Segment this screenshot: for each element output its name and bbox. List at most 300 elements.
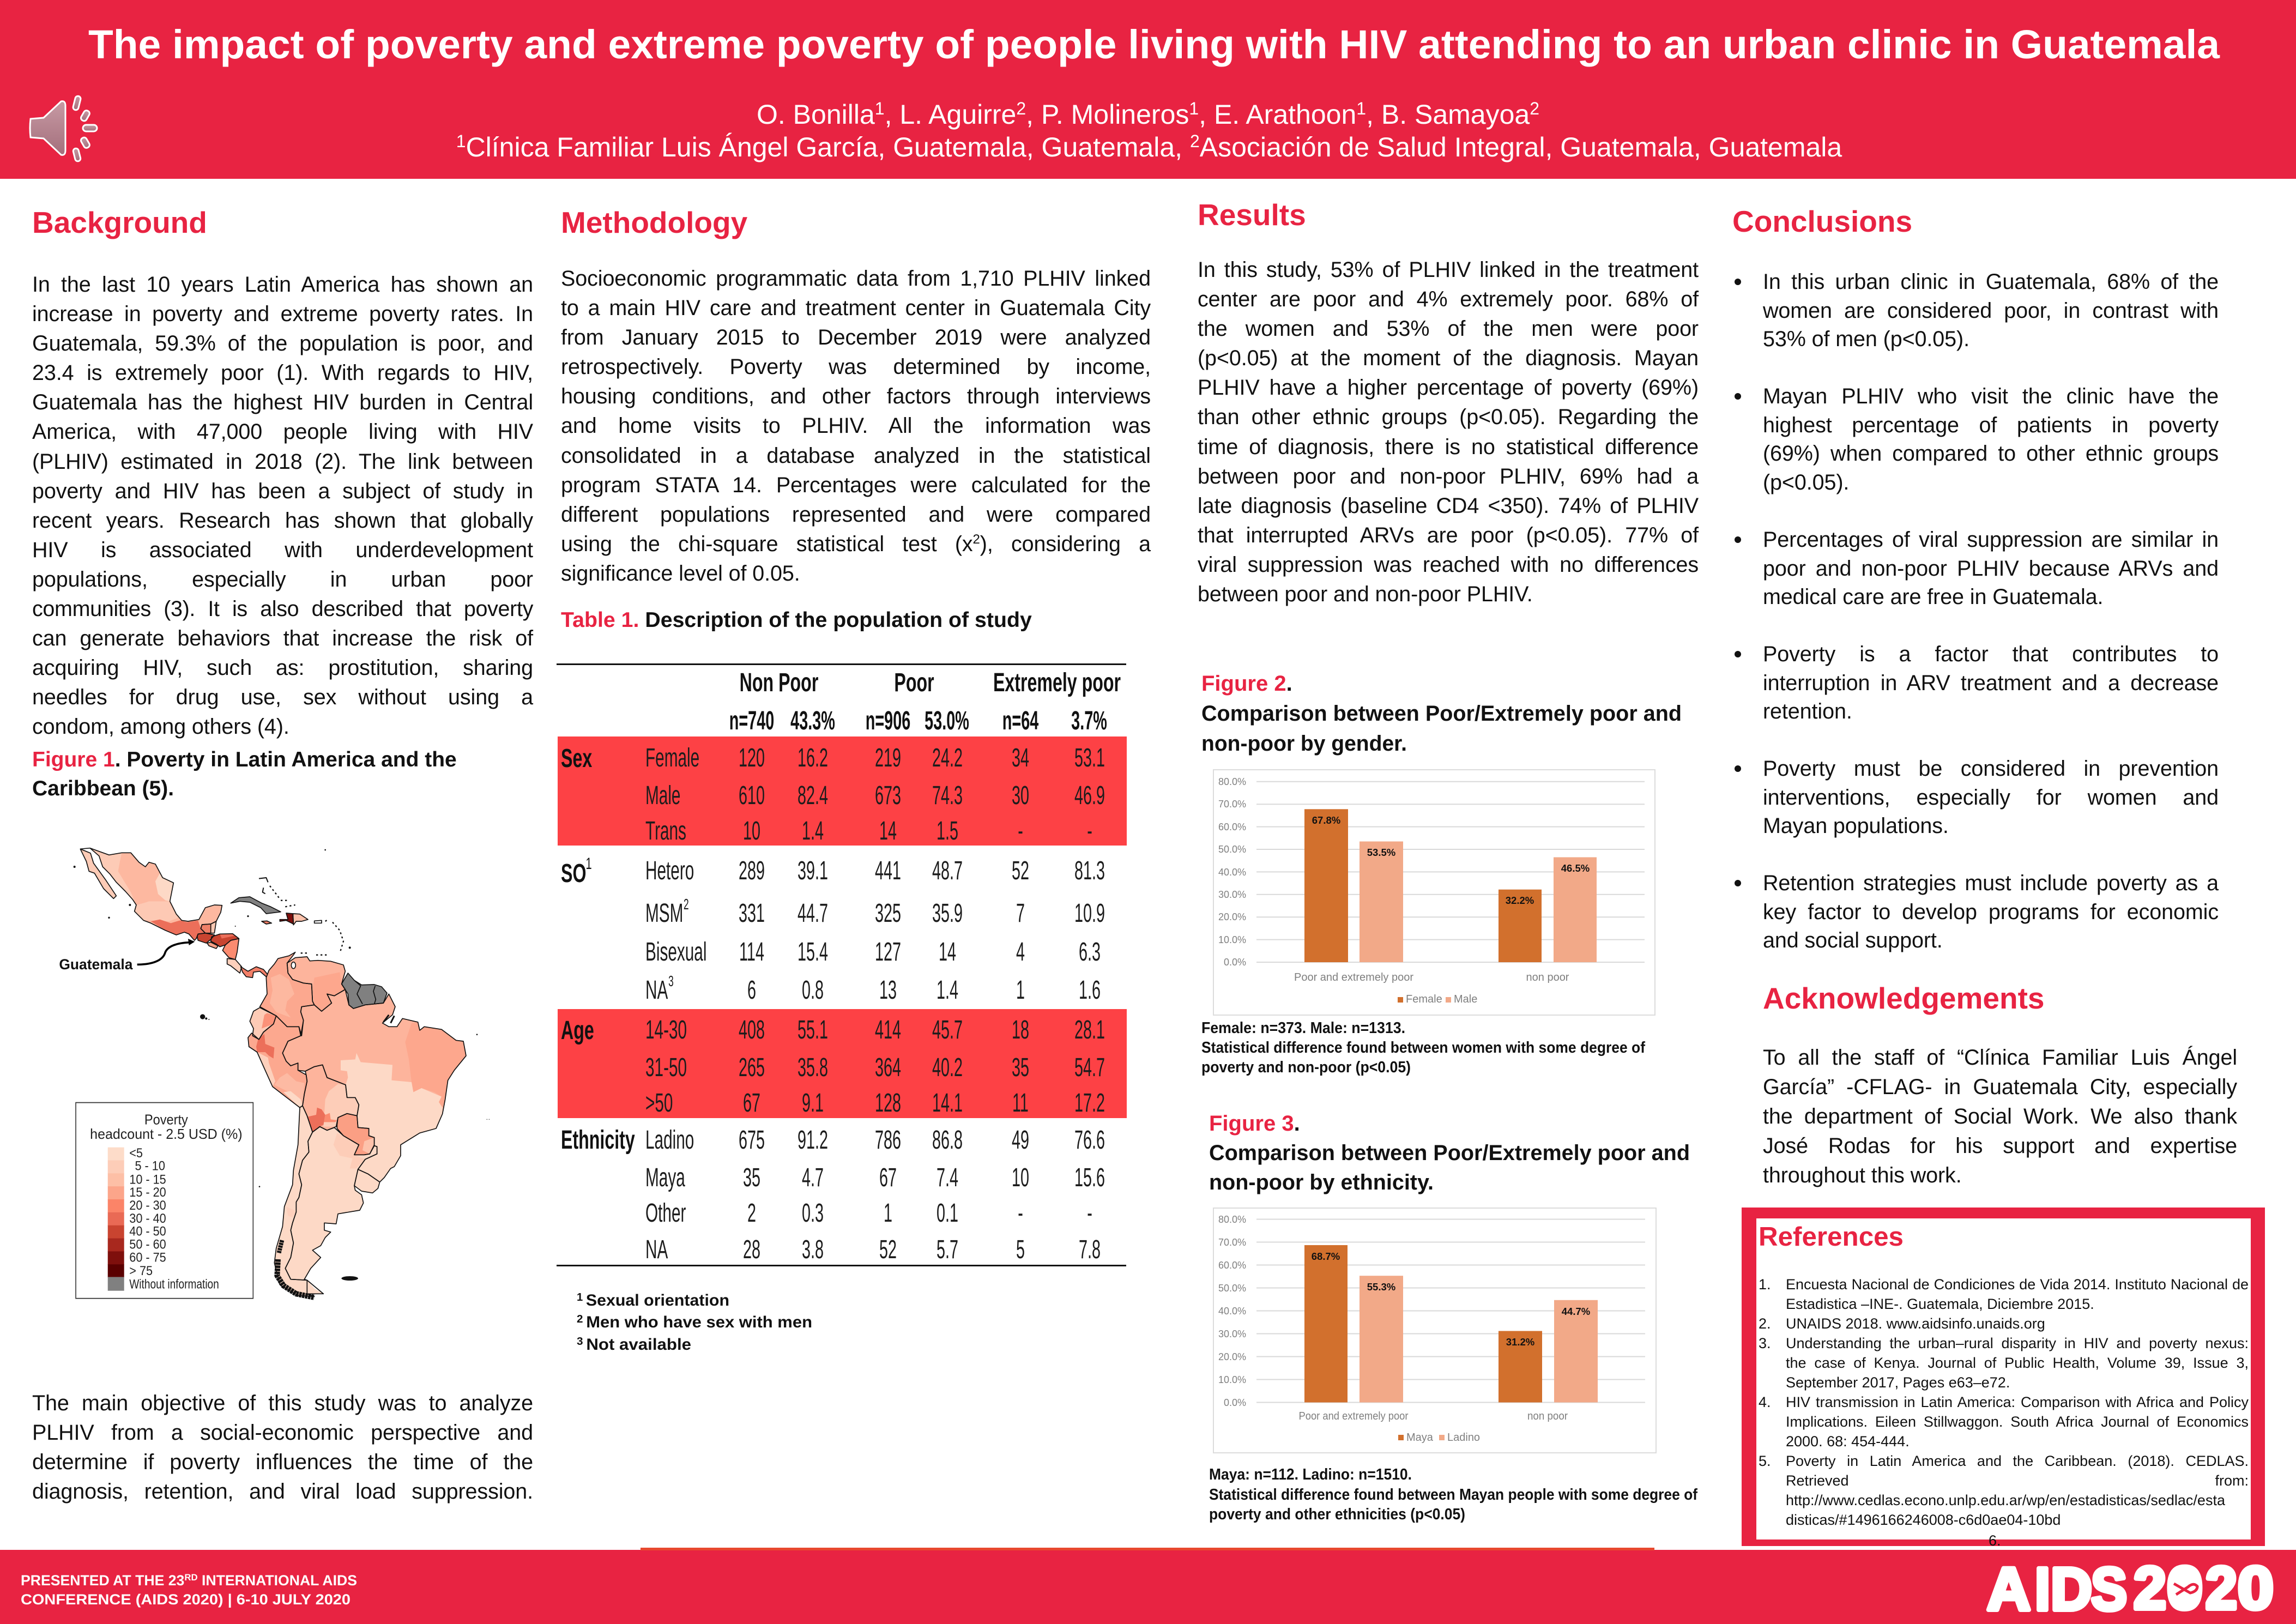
panel: figure 3 caption: Figure 3. [1209,1112,1300,1136]
column: extremely poor n: - [1018,817,1023,846]
column: extremely poor n: 35 [1012,1053,1029,1082]
text: main objective: PLHIV from a social-economic perspective and [32,1421,533,1445]
column: non poor percent: 3.8 [802,1235,824,1264]
callout: Guatemala arrow [137,939,195,964]
column: extremely poor n: 1 [1016,976,1025,1005]
column: poor percent: 40.2 [932,1053,963,1082]
table row labels: NA [645,976,668,1005]
column: extremely poor n: 34 [1012,744,1029,772]
map legend: 5 - 10 [135,1158,165,1173]
logo: AIDS 2020: D [2051,1556,2092,1623]
conference note [21,1572,357,1608]
column: poor n: 786 [875,1126,901,1155]
chart 3 categories: Poor and extremely poor [1298,1410,1409,1422]
column: extremely poor n: 11 [1012,1089,1029,1118]
table 1 caption: Table 1. Description of the population of study [561,608,1032,632]
chart 2 gridlines [1256,782,1645,962]
authors: 2 [1016,99,1026,118]
map legend: <5 [129,1145,143,1160]
column: poor percent: 1.4 [936,976,958,1005]
column: non poor n: 114 [739,938,764,967]
text: reference list [1759,1276,2249,1549]
bullet 3: poor and non-poor PLHIV because ARVs and [1763,557,2219,581]
table row labels: MSM [645,899,683,928]
column: non poor percent: 9.1 [802,1089,824,1118]
chart 2 axis labels [1218,776,1246,968]
text: results paragraph: between poor and non-poor PLHIV. [1198,582,1533,606]
bullet 2 [1735,384,2219,494]
map: South America [248,952,490,1297]
table footnotes: 3 [577,1336,586,1348]
column: extremely poor n: 30 [1012,781,1029,810]
logo: AIDS 2020 [1987,1555,2274,1623]
map: Mexico, Central America and Caribbean [74,848,351,1020]
text: reference list: 2000. 68: 454-444. [1786,1433,1910,1450]
text: background paragraph: needles for drug use, sex without using a [32,685,533,709]
panel: table 1 population description [557,663,1127,1354]
table group headers: n=64 [1002,707,1038,735]
text: acknowledgements [1763,1046,2237,1187]
column: poor n: 325 [875,899,901,928]
table footnotes: Sexual orientation [586,1291,729,1309]
column: poor n: 1 [884,1199,892,1228]
table red bands [558,736,1127,1118]
chart 2 data labels: 53.5% [1367,847,1395,858]
column: extremely poor n: 5 [1016,1235,1025,1264]
chart: figure 3 bars by ethnicity [1213,1208,1656,1453]
table category labels: SO [561,859,586,888]
text: results paragraph: than other ethnic groups (p<0.05). Regarding the [1198,405,1699,429]
panel: figure 2 caption: Figure 2. [1201,672,1292,696]
authors: 1 [875,99,885,118]
text: background paragraph: communities (3). It is also described that poverty [32,597,533,621]
bullet 6: and social support. [1763,928,1943,952]
text: reference list: HIV transmission in Latin America: Comparison with Africa and Policy [1786,1394,2249,1410]
map legend: Poverty [144,1113,188,1128]
chart 3 legend [1398,1432,1480,1444]
table row labels: 3 [668,973,674,989]
bullet 4: Poverty is a factor that contributes to [1763,642,2219,666]
header banner [0,0,2296,179]
bullet 4: retention. [1763,699,1852,723]
bullet 1: women are considered poor, in contrast with [1763,299,2219,323]
table category labels: Age [561,1016,594,1045]
table footnotes: Men who have sex with men [586,1313,812,1331]
text: results paragraph: viral suppression was reached with no differences [1198,553,1699,577]
column: non poor percent: 1.4 [802,817,824,846]
column: extremely poor n [1012,744,1029,1264]
chart 3 axis labels: 50.0% [1218,1283,1246,1294]
figure 1 caption [32,748,457,800]
text: background paragraph [32,273,533,739]
bullet 2: (p<0.05). [1763,470,1849,494]
panel: figure 2 caption: non-poor by gender. [1201,732,1407,756]
text: methodology paragraph: different populations represented and were compared [561,503,1151,527]
bullet 3: medical care are free in Guatemala. [1763,585,2103,609]
column: poor percent: 14 [939,938,956,967]
map specks [250,1034,490,1281]
conference note: RD [184,1572,198,1583]
text: reference list: 4. [1759,1394,1771,1410]
text: conclusions list [1735,270,2219,952]
column: extremely poor percent: 53.1 [1074,744,1105,772]
chart 3 categories: non poor [1527,1410,1568,1422]
text: reference list: 3. [1759,1335,1771,1351]
text: background paragraph: acquiring HIV, such as: prostitution, sharing [32,656,533,680]
column: poor percent: 0.1 [936,1199,958,1228]
bullet 1: 53% of men (p<0.05). [1763,327,1969,351]
table category labels: Ethnicity [561,1125,635,1155]
chart 3 categories [1298,1410,1568,1422]
column: poor n: 14 [879,817,897,846]
table row labels: Trans [645,817,686,846]
references heading: References [1759,1222,1904,1252]
text: background paragraph: poverty and HIV has been a subject of study in [32,479,533,503]
text: reference list: http://www.cedlas.econo.unlp.edu.ar/wp/en/estadisticas/sedlac/esta [1786,1492,2225,1508]
text: results paragraph: center are poor and 4% extremely poor. 68% of [1198,287,1699,311]
authors: 1 [1356,99,1366,118]
affiliations: 2 [1190,131,1200,151]
column: extremely poor n: 10 [1012,1163,1029,1192]
chart 2 categories: Poor and extremely poor [1294,971,1413,983]
chart 2 categories: non poor [1526,971,1569,983]
column: poor n: 441 [875,856,901,885]
text: main objective: determine if poverty influences the time of the [32,1450,533,1474]
text: results paragraph: PLHIV have a higher percentage of poverty (69%) [1198,376,1699,400]
figure 1 caption: Caribbean (5). [32,777,174,800]
panel: figure 2 caption [1201,672,1682,756]
text: reference list: 5. [1759,1453,1771,1469]
conference note: PRESENTED AT THE 23 [21,1572,187,1589]
table group headers: 3.7% [1071,707,1107,735]
text: methodology paragraph: significance level of 0.05. [561,562,800,585]
bullet 6 [1735,871,2219,952]
text: reference list: Retrieved from: [1786,1472,2249,1489]
figure 2 note [1201,1019,1645,1076]
column: non poor n: 610 [739,781,765,810]
text: results paragraph: between poor and non-poor PLHIV, 69% had a [1198,464,1699,488]
table category labels: Sex [561,744,592,773]
panel: figure 3 caption: non-poor by ethnicity. [1209,1170,1434,1194]
chart 3 data labels: 31.2% [1506,1336,1534,1348]
chart 3 data labels: 44.7% [1562,1306,1590,1317]
table row labels: Bisexual [645,938,706,967]
text: methodology paragraph: Socioeconomic programmatic data from 1,710 PLHIV linked [561,267,1151,291]
column: non poor percent: 4.7 [802,1163,824,1192]
chart 2 axis labels: 80.0% [1218,776,1246,787]
bullet 3 [1735,528,2219,609]
affiliations: Asociación de Salud Integral, Guatemala, Guatemala [1200,132,1842,162]
figure 2 note: poverty and non-poor (p<0.05) [1201,1059,1411,1076]
chart 3 axis labels: 0.0% [1224,1397,1246,1408]
map legend: 20 - 30 [129,1198,166,1212]
table row labels [645,744,706,1264]
text: acknowledgements: García” -CFLAG- in Guatemala City, especially [1763,1075,2237,1099]
bullet 1: In this urban clinic in Guatemala, 68% of the [1763,270,2219,294]
table row labels: Other [645,1199,686,1228]
column: non poor percent: 15.4 [797,938,828,967]
chart 2 legend: Male [1454,993,1477,1005]
text: reference list: Encuesta Nacional de Condiciones de Vida 2014. Instituto Nacional de [1786,1276,2249,1293]
column: non poor n: 10 [743,817,760,846]
text: methodology paragraph [561,267,1151,585]
column: extremely poor percent: 17.2 [1074,1089,1105,1118]
text: methodology paragraph: housing conditions, and other factors through interviews [561,384,1151,408]
column: non poor percent: 55.1 [797,1016,828,1045]
chart 3 data labels [1312,1251,1590,1348]
figure 2 note: Statistical difference found between women with some degree of [1201,1039,1645,1056]
column: non poor n: 67 [743,1089,760,1118]
chart 2 axis labels: 50.0% [1218,844,1246,855]
table row labels: NA [645,1235,668,1264]
table group headers: n=906 [866,707,910,735]
table row labels: Female [645,744,699,772]
table footnotes: 1 [577,1291,586,1303]
chart 2 axis labels: 40.0% [1218,867,1246,878]
table group headers: Non Poor [740,668,818,697]
column: non poor n: 6 [747,976,756,1005]
table group headers: n=740 [729,707,774,735]
text: results paragraph: the women and 53% of the men were poor [1198,317,1699,341]
map legend: 10 - 15 [129,1172,166,1187]
column: non poor percent: 44.7 [797,899,828,928]
conference note: INTERNATIONAL AIDS [198,1572,357,1589]
text: reference list: Implications. Eileen Stillwaggon. South Africa Journal of Economics [1786,1414,2249,1430]
text: background paragraph: Guatemala, 59.3% of the population is poor, and [32,331,533,355]
table category labels [561,744,635,1155]
bullet 2: Mayan PLHIV who visit the clinic have the [1763,384,2219,408]
South America borders [248,952,466,1297]
text: reference list: 2. [1759,1315,1771,1332]
chart 2 data labels [1312,814,1590,906]
authors: , L. Aguirre [885,99,1016,130]
column: non poor n: 675 [739,1126,765,1155]
heading: Methodology: Methodology [561,206,747,239]
figure 3 note: Maya: n=112. Ladino: n=1510. [1209,1466,1412,1483]
chart 3 axis labels: 10.0% [1218,1374,1246,1385]
text: reference list: the case of Kenya. Journal of Public Health, Volume 39, Issue 3, [1786,1355,2249,1371]
table group headers [729,668,1121,735]
text: background paragraph: 23.4 is extremely poor (1). With regards to HIV, [32,361,533,385]
column: extremely poor percent: 28.1 [1074,1016,1105,1045]
chart 2 data labels: 46.5% [1561,862,1590,874]
column: poor percent: 14.1 [932,1089,963,1118]
text: reference list: Poverty in Latin America and the Caribbean. (2018). CEDLAS. [1786,1453,2249,1469]
table category labels: 1 [586,855,592,873]
column: extremely poor percent [1074,744,1105,1264]
text: methodology paragraph: from January 2015 to December 2019 were analyzed [561,325,1151,349]
bullet 4: interruption in ARV treatment and a decrease [1763,671,2219,695]
column: non poor n: 35 [743,1163,760,1192]
map: poverty in Latin America [59,848,490,1299]
table group headers: Extremely poor [993,668,1121,697]
chart 3 gridlines [1256,1219,1645,1402]
map legend: 30 - 40 [129,1211,166,1225]
chart 3 axis labels: 70.0% [1218,1237,1246,1248]
column: extremely poor n: 18 [1012,1016,1029,1045]
bullet 3: Percentages of viral suppression are similar in [1763,528,2219,552]
column: poor n: 13 [879,976,897,1005]
text: reference list: 1. [1759,1276,1771,1293]
column: poor percent: 45.7 [932,1016,963,1045]
figure 2 note: Female: n=373. Male: n=1313. [1201,1019,1405,1037]
chart 2 axis labels: 70.0% [1218,799,1246,810]
callout: Guatemala label: Guatemala [59,956,133,973]
text: background paragraph: HIV is associated with underdevelopment [32,538,533,562]
table footnotes [577,1291,812,1354]
chart 2 data labels: 32.2% [1506,895,1534,906]
panel: figure 2 caption: Comparison between Poor/Extremely poor and [1201,702,1682,726]
chart 3 axis labels: 20.0% [1218,1351,1246,1362]
column: poor n: 673 [875,781,901,810]
text: background paragraph: In the last 10 years Latin America has shown an [32,273,533,297]
column: non poor percent: 35.8 [797,1053,828,1082]
text: acknowledgements: the department of Social Work. We also thank [1763,1104,2237,1128]
column: poor n: 67 [879,1163,897,1192]
column: non poor percent: 0.8 [802,976,824,1005]
chart 2 legend: Female [1406,993,1442,1005]
column: non poor n: 28 [743,1235,760,1264]
column: extremely poor n: 49 [1012,1126,1029,1155]
column: poor n: 364 [875,1053,901,1082]
bullet 5: interventions, especially for women and [1763,786,2219,810]
column: non poor percent: 39.1 [797,856,828,885]
logo: AIDS 2020: 2 [2134,1555,2166,1622]
column: extremely poor percent: 81.3 [1074,856,1105,885]
table row labels: 2 [684,896,689,913]
text: main objective: diagnosis, retention, and viral load suppression. [32,1480,533,1504]
figure 3 note [1209,1466,1697,1523]
figure 3 note: poverty and other ethnicities (p<0.05) [1209,1506,1465,1523]
chart 2 axis labels: 0.0% [1224,957,1246,968]
column: poor n: 52 [879,1235,897,1264]
column: extremely poor n: 4 [1016,938,1025,967]
panel: figure 3 caption: Comparison between Poor/Extremely poor and [1209,1141,1690,1165]
title: The impact of poverty and extreme poverty of people living with HIV attending to an urban clinic in Guatemala [88,22,2220,67]
text: methodology paragraph: program STATA 14. Percentages were calculated for the [561,473,1151,497]
chart 3 axis labels: 80.0% [1218,1214,1246,1225]
chart 2 axis labels: 30.0% [1218,889,1246,900]
map legend: 40 - 50 [129,1224,166,1239]
affiliations: 1 [456,131,466,151]
chart: figure 2 bars by gender [1213,770,1655,1015]
bullet 5: Poverty must be considered in prevention [1763,757,2219,781]
column: poor n: 414 [875,1016,901,1045]
text: reference list: Estadistica –INE-. Guatemala, Diciembre 2015. [1786,1296,2094,1312]
text: methodology paragraph: using the chi-square statistical test (x2), considering a [561,532,1151,556]
text: main objective [32,1391,533,1504]
text: acknowledgements: throughout this work. [1763,1163,1962,1187]
heading: Conclusions: Conclusions [1732,204,1912,238]
bullet 2: highest percentage of patients in poverty [1763,413,2219,437]
table footnotes: 2 [577,1313,586,1325]
chart 3 data labels: 68.7% [1312,1251,1340,1262]
table row labels: 14-30 [645,1016,687,1045]
column: extremely poor percent: 54.7 [1074,1053,1105,1082]
footer banner [0,1548,2296,1624]
bullet 4 [1735,642,2219,723]
text: main objective: The main objective of this study was to analyze [32,1391,533,1415]
Mexico and Central America borders [80,848,343,977]
column: extremely poor percent: 46.9 [1074,781,1105,810]
text: reference list: disticas/#1496166246008-c6d0ae04-10bd [1786,1512,2061,1528]
column: extremely poor n: 7 [1016,899,1025,928]
column: extremely poor percent: 7.8 [1079,1235,1101,1264]
heading: Results: Results [1198,198,1306,232]
column: extremely poor percent: 6.3 [1079,938,1101,967]
text: results paragraph: late diagnosis (baseline CD4 <350). 74% of PLHIV [1198,494,1699,518]
logo: AIDS 2020: 0 [2167,1555,2203,1622]
column: extremely poor percent: - [1087,1199,1092,1228]
bullet 2: (69%) when compared to other ethnic groups [1763,442,2219,466]
text: 6. [1989,1532,2001,1549]
authors: , P. Molineros [1026,99,1189,130]
column: non poor percent: 16.2 [797,744,828,772]
authors: 2 [1530,99,1539,118]
chart 2 data labels: 67.8% [1312,814,1340,826]
column: poor percent: 74.3 [932,781,963,810]
column: extremely poor percent: - [1087,817,1092,846]
panel: figure 3 caption [1209,1112,1690,1194]
table row labels: 31-50 [645,1053,687,1082]
authors: , B. Samayoa [1366,99,1530,130]
map legend: > 75 [129,1263,153,1278]
heading: Background: Background [32,206,207,239]
column: non poor percent [797,744,828,1264]
logo: AIDS 2020: 0 [2238,1555,2274,1622]
column: poor percent: 5.7 [936,1235,958,1264]
text: reference list: UNAIDS 2018. www.aidsinfo.unaids.org [1786,1315,2045,1332]
table row labels: Male [645,781,680,810]
figure 1 caption: Figure 1. Poverty in Latin America and the [32,748,457,771]
column: poor n [875,744,901,1264]
column: extremely poor percent: 1.6 [1079,976,1101,1005]
chart 3 axis labels: 40.0% [1218,1306,1246,1317]
authors: , E. Arathoon [1199,99,1356,130]
chart 3 bars [1304,1245,1598,1402]
column: non poor percent: 0.3 [802,1199,824,1228]
text: background paragraph: Guatemala has the highest HIV burden in Central [32,390,533,414]
column: non poor n: 2 [747,1199,756,1228]
column: poor n: 219 [875,744,901,772]
chart 2 legend [1398,993,1477,1005]
figure 3 note: Statistical difference found between Mayan people with some degree of [1209,1486,1697,1504]
map legend: 15 - 20 [129,1185,166,1199]
bullet 5 [1735,757,2219,838]
text: background paragraph: increase in poverty and extreme poverty rates. In [32,302,533,326]
map legend: 50 - 60 [129,1237,166,1252]
bullet 5: Mayan populations. [1763,814,1949,838]
text: methodology paragraph: to a main HIV care and treatment center in Guatemala City [561,296,1151,320]
table row labels: Maya [645,1163,685,1192]
column: extremely poor percent: 76.6 [1074,1126,1105,1155]
column: poor percent: 7.4 [936,1163,958,1192]
chart 2 axis labels: 60.0% [1218,822,1246,832]
logo: AIDS 2020: S [2091,1556,2127,1623]
chart 2 axis labels: 20.0% [1218,911,1246,922]
text: acknowledgements: To all the staff of “Clínica Familiar Luis Ángel [1763,1046,2237,1070]
logo: AIDS 2020: A [1987,1556,2031,1623]
column: non poor n: 408 [739,1016,765,1045]
text: background paragraph: populations, especially in urban poor [32,568,533,591]
text: background paragraph: can generate behaviors that increase the risk of [32,626,533,650]
column: poor n: 128 [875,1089,901,1118]
map legend [76,1103,253,1299]
map legend: Without information [129,1277,219,1291]
text: background paragraph: (PLHIV) estimated in 2018 (2). The link between [32,450,533,474]
column: extremely poor percent: 15.6 [1074,1163,1105,1192]
text: acknowledgements: José Rodas for his support and expertise [1763,1134,2237,1158]
